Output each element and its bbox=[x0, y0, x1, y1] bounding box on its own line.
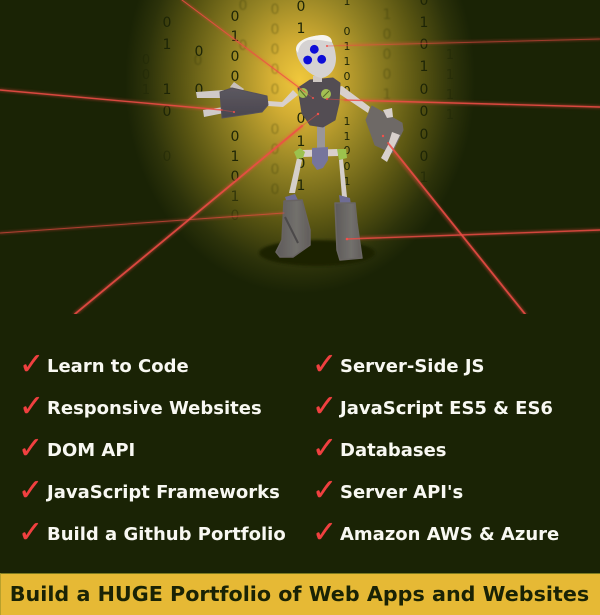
binary code columns: 0 bbox=[420, 104, 428, 120]
item: JavaScript ES5 & ES6: JavaScript ES5 & ES6 bbox=[340, 398, 553, 419]
item: Responsive Websites: Responsive Websites bbox=[47, 398, 262, 419]
item: Learn to Code: ✓ bbox=[19, 347, 44, 382]
laser beams outer glow bbox=[0, 0, 600, 314]
right leg bbox=[339, 159, 347, 197]
binary code columns: 0 bbox=[420, 127, 428, 143]
item: Learn to Code bbox=[19, 347, 189, 382]
neck bbox=[313, 76, 322, 82]
binary code columns: 1 bbox=[420, 15, 428, 31]
binary code columns: 0 bbox=[231, 49, 239, 65]
robot bbox=[196, 35, 403, 260]
item: Build a Github Portfolio bbox=[18, 515, 286, 550]
item: Responsive Websites bbox=[19, 389, 262, 424]
item: Server API's: ✓ bbox=[312, 473, 337, 508]
binary code columns: 0 bbox=[271, 162, 279, 178]
item: Server-Side JS: ✓ bbox=[312, 347, 337, 382]
binary code columns: 0 bbox=[163, 104, 171, 120]
item: JavaScript Frameworks: ✓ bbox=[18, 473, 43, 508]
pelvis bbox=[312, 147, 328, 170]
binary code columns: 0 bbox=[194, 53, 202, 69]
footer banner bbox=[0, 573, 600, 615]
binary code columns: 0 bbox=[239, 38, 247, 54]
binary code columns: 0 bbox=[271, 42, 279, 58]
hip joints bbox=[294, 148, 305, 159]
item: Server-Side JS: Server-Side JS bbox=[340, 356, 484, 377]
binary code columns: 1 bbox=[163, 82, 171, 98]
binary code columns: 0 bbox=[195, 44, 203, 60]
binary code columns: 0 bbox=[163, 15, 171, 31]
item: Amazon AWS & Azure bbox=[312, 515, 559, 550]
binary code columns: 1 bbox=[297, 21, 305, 37]
torso bbox=[298, 78, 340, 127]
right boot bbox=[335, 203, 362, 260]
binary code columns: 0 bbox=[383, 67, 391, 83]
binary code columns: 1 bbox=[420, 59, 428, 75]
hip bar bbox=[302, 149, 338, 157]
head bbox=[296, 35, 336, 78]
right hand bbox=[366, 106, 403, 162]
laser impact dots bbox=[233, 45, 384, 240]
binary code columns: 0 bbox=[163, 149, 171, 165]
item: JavaScript ES5 & ES6: ✓ bbox=[312, 389, 337, 424]
binary code columns: 0 bbox=[297, 111, 305, 127]
binary code columns: 1 bbox=[446, 48, 454, 63]
item: Databases bbox=[312, 431, 447, 466]
item: JavaScript Frameworks: JavaScript Frameworks bbox=[47, 482, 280, 503]
item: Responsive Websites: ✓ bbox=[19, 389, 44, 424]
binary code columns: 0 bbox=[344, 70, 350, 83]
binary code columns: 0 bbox=[344, 25, 350, 38]
binary code columns: 0 bbox=[271, 62, 279, 78]
item: Build a Github Portfolio: Build a Github Portfolio bbox=[47, 524, 286, 545]
item: DOM API: ✓ bbox=[18, 431, 43, 466]
yellow spotlight bbox=[110, 0, 490, 314]
binary code columns: 1 bbox=[446, 68, 454, 83]
binary code columns: 0 bbox=[195, 82, 203, 98]
item: Server API's: Server API's bbox=[340, 482, 463, 503]
binary code columns: 0 bbox=[142, 68, 150, 83]
left hand bbox=[196, 82, 268, 118]
left arm bbox=[268, 90, 298, 107]
binary code columns: 0 bbox=[420, 37, 428, 53]
binary code columns: 1 bbox=[446, 88, 454, 103]
binary code columns: 0 bbox=[231, 69, 239, 85]
binary code columns: 1 bbox=[344, 40, 350, 53]
binary code columns: 1 bbox=[344, 115, 350, 128]
right arm bbox=[338, 86, 370, 113]
binary code columns: 0 bbox=[344, 160, 350, 173]
binary code columns: 1 bbox=[231, 189, 239, 205]
item: DOM API: DOM API bbox=[47, 440, 135, 461]
feature list: right column bbox=[312, 347, 559, 550]
feature list: left column bbox=[18, 347, 286, 550]
binary code columns: 1 bbox=[231, 29, 239, 45]
binary code columns: 1 bbox=[344, 130, 350, 143]
floor shadow bbox=[259, 240, 375, 266]
item: Databases: ✓ bbox=[312, 431, 337, 466]
item: Build a Github Portfolio: ✓ bbox=[18, 515, 43, 550]
binary code columns: 1 bbox=[231, 149, 239, 165]
item: Databases: Databases bbox=[340, 440, 447, 461]
item: Server-Side JS bbox=[312, 347, 484, 382]
item: JavaScript Frameworks bbox=[18, 473, 280, 508]
item: Learn to Code: Learn to Code bbox=[47, 356, 189, 377]
item: Server API's bbox=[312, 473, 463, 508]
binary code columns: 1 bbox=[297, 178, 305, 194]
footer banner: Build a HUGE Portfolio of Web Apps and Websites bbox=[10, 582, 589, 606]
binary code columns: 0 bbox=[383, 27, 391, 43]
binary code columns bbox=[142, 0, 454, 224]
left leg bbox=[289, 158, 302, 193]
binary code columns: 1 bbox=[383, 87, 391, 103]
binary code columns: 0 bbox=[231, 129, 239, 145]
binary code columns: 0 bbox=[344, 144, 350, 157]
hero illustration: robot with lasers bbox=[0, 0, 600, 314]
binary code columns: 0 bbox=[142, 53, 150, 68]
binary code columns: 1 bbox=[297, 134, 305, 150]
binary code columns: 1 bbox=[344, 55, 350, 68]
binary code columns: 0 bbox=[231, 169, 239, 185]
binary code columns: 0 bbox=[271, 142, 279, 158]
item: JavaScript ES5 & ES6 bbox=[312, 389, 553, 424]
binary code columns: 0 bbox=[271, 22, 279, 38]
item: Amazon AWS & Azure: Amazon AWS & Azure bbox=[340, 524, 559, 545]
chest bolts bbox=[298, 88, 331, 99]
laser beams core bbox=[0, 0, 600, 314]
binary code columns: 1 bbox=[420, 170, 428, 186]
binary code columns: 0 bbox=[420, 149, 428, 165]
left boot bbox=[276, 200, 310, 257]
binary code columns: 1 bbox=[142, 83, 150, 98]
item: DOM API bbox=[18, 431, 135, 466]
binary code columns: 0 bbox=[383, 47, 391, 63]
binary code columns: 0 bbox=[231, 208, 239, 224]
item: Amazon AWS & Azure: ✓ bbox=[312, 515, 337, 550]
binary code columns: 1 bbox=[344, 175, 350, 188]
binary code columns: 0 bbox=[271, 122, 279, 138]
binary code columns: 0 bbox=[344, 84, 350, 97]
binary code columns: 0 bbox=[420, 82, 428, 98]
ankle cuffs bbox=[285, 194, 298, 203]
binary code columns: 0 bbox=[271, 82, 279, 98]
binary code columns: 0 bbox=[297, 156, 305, 172]
spine bbox=[317, 124, 325, 149]
binary code columns: 0 bbox=[231, 9, 239, 25]
binary code columns: 1 bbox=[383, 7, 391, 23]
binary code columns: 1 bbox=[163, 37, 171, 53]
binary code columns: 0 bbox=[271, 182, 279, 198]
binary code columns: 1 bbox=[446, 108, 454, 123]
binary code columns: 0 bbox=[271, 2, 279, 18]
